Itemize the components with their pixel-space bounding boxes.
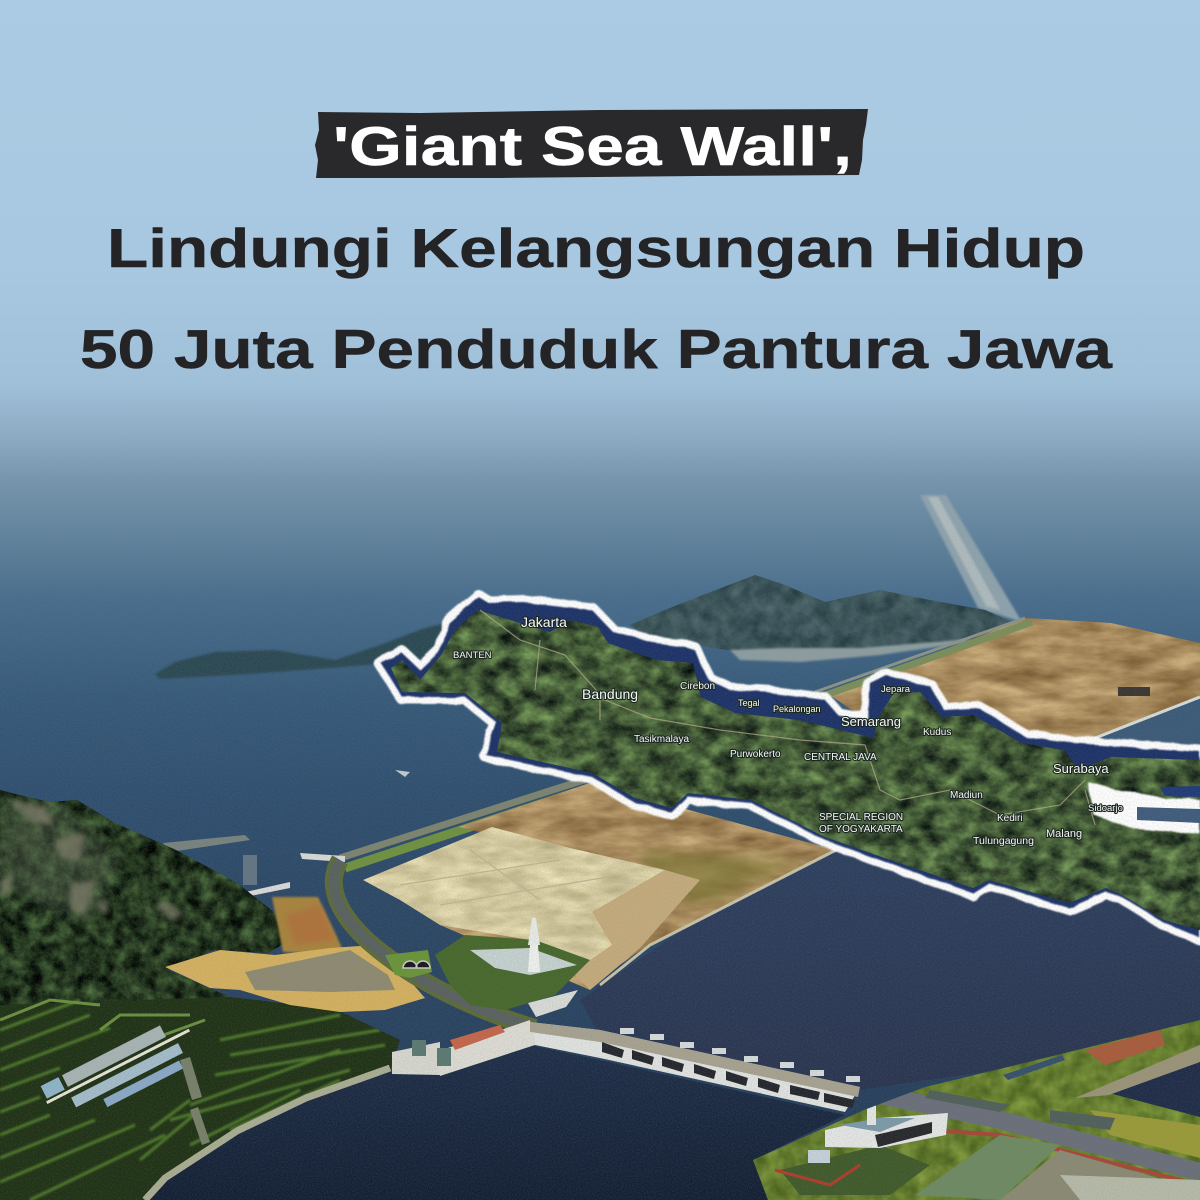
map: place labels: BANTEN bbox=[453, 650, 492, 661]
map: place labels: Sidoarjo bbox=[1088, 803, 1123, 814]
map: bay cut near Surabaya bbox=[1088, 782, 1200, 834]
title: third line: 50 Juta Penduduk Pantura Jawa bbox=[80, 318, 1112, 380]
map: place labels: Pekalongan bbox=[773, 704, 821, 714]
map: place labels: Purwokerto bbox=[730, 749, 781, 760]
coastal blue rim bbox=[381, 597, 1200, 938]
film grain overlay bbox=[0, 526, 1200, 1200]
land texture bbox=[381, 597, 1200, 938]
title: tape label bbox=[315, 109, 868, 178]
field bbox=[915, 1135, 1060, 1200]
map: place labels bbox=[453, 614, 1123, 847]
monument park bbox=[435, 918, 590, 1017]
map: place labels: Jepara bbox=[881, 684, 911, 695]
map: place labels: Surabaya bbox=[1053, 761, 1109, 776]
reclaimed land: tan bbox=[440, 783, 833, 990]
map: place labels: Semarang bbox=[841, 714, 901, 729]
sea wall gates bbox=[530, 1022, 860, 1112]
breakwater road bbox=[340, 618, 1032, 868]
far causeway bbox=[920, 495, 1022, 622]
highway curve bbox=[334, 860, 535, 1028]
tunnel portal bbox=[385, 950, 432, 978]
signboard on hillside bbox=[39, 1014, 204, 1131]
map: roads bbox=[480, 610, 1095, 825]
pier and boats bbox=[163, 770, 410, 898]
lower sea bbox=[145, 1045, 845, 1200]
road bbox=[880, 1095, 1200, 1172]
stair blocks bbox=[180, 1057, 210, 1145]
map: place labels: Bandung bbox=[582, 686, 638, 702]
sand strip edge bbox=[600, 850, 836, 985]
map: place labels: CENTRAL JAVA bbox=[804, 752, 877, 763]
map: Java island cutout bbox=[381, 597, 1200, 938]
right lower land bbox=[740, 1010, 1200, 1200]
far right sea bbox=[1080, 700, 1200, 760]
right sea water bbox=[580, 850, 1200, 1090]
map: place labels: Tasikmalaya bbox=[634, 734, 689, 745]
map: place labels: OF YOGYAKARTA bbox=[819, 824, 903, 835]
tan infill near monument bbox=[560, 870, 700, 990]
title: second line: Lindungi Kelangsungan Hidup bbox=[107, 217, 1085, 279]
map: place labels: Kudus bbox=[923, 727, 951, 738]
map: place labels: Jakarta bbox=[521, 614, 567, 630]
reclaimed land: upper right bbox=[832, 618, 1200, 738]
map: place labels: Cirebon bbox=[680, 681, 715, 692]
bright sand below the mountain bbox=[165, 897, 425, 1012]
white border bbox=[381, 597, 1200, 938]
terraces bbox=[0, 997, 400, 1200]
map: place labels: Kediri bbox=[997, 813, 1023, 824]
reclaimed land: cream bbox=[363, 827, 665, 960]
map: place labels: Tulungagung bbox=[973, 835, 1034, 847]
left sluice towers bbox=[392, 1020, 535, 1076]
hill: left mountain and terraces bbox=[0, 780, 420, 1200]
shoreline wall bbox=[145, 1068, 390, 1200]
map: place labels: SPECIAL REGION bbox=[819, 812, 903, 823]
island: left bbox=[155, 622, 450, 679]
island: mountain behind bbox=[625, 570, 1025, 662]
control building bbox=[825, 1113, 948, 1148]
rock faces bbox=[0, 800, 185, 920]
sea wall edge: upper right bbox=[1090, 697, 1200, 740]
map: place labels: Malang bbox=[1046, 828, 1082, 840]
map: place labels: Madiun bbox=[950, 790, 983, 801]
map: place labels: Tegal bbox=[738, 698, 760, 708]
harbour village bbox=[730, 640, 985, 662]
title: tape label: 'Giant Sea Wall', bbox=[333, 115, 852, 177]
